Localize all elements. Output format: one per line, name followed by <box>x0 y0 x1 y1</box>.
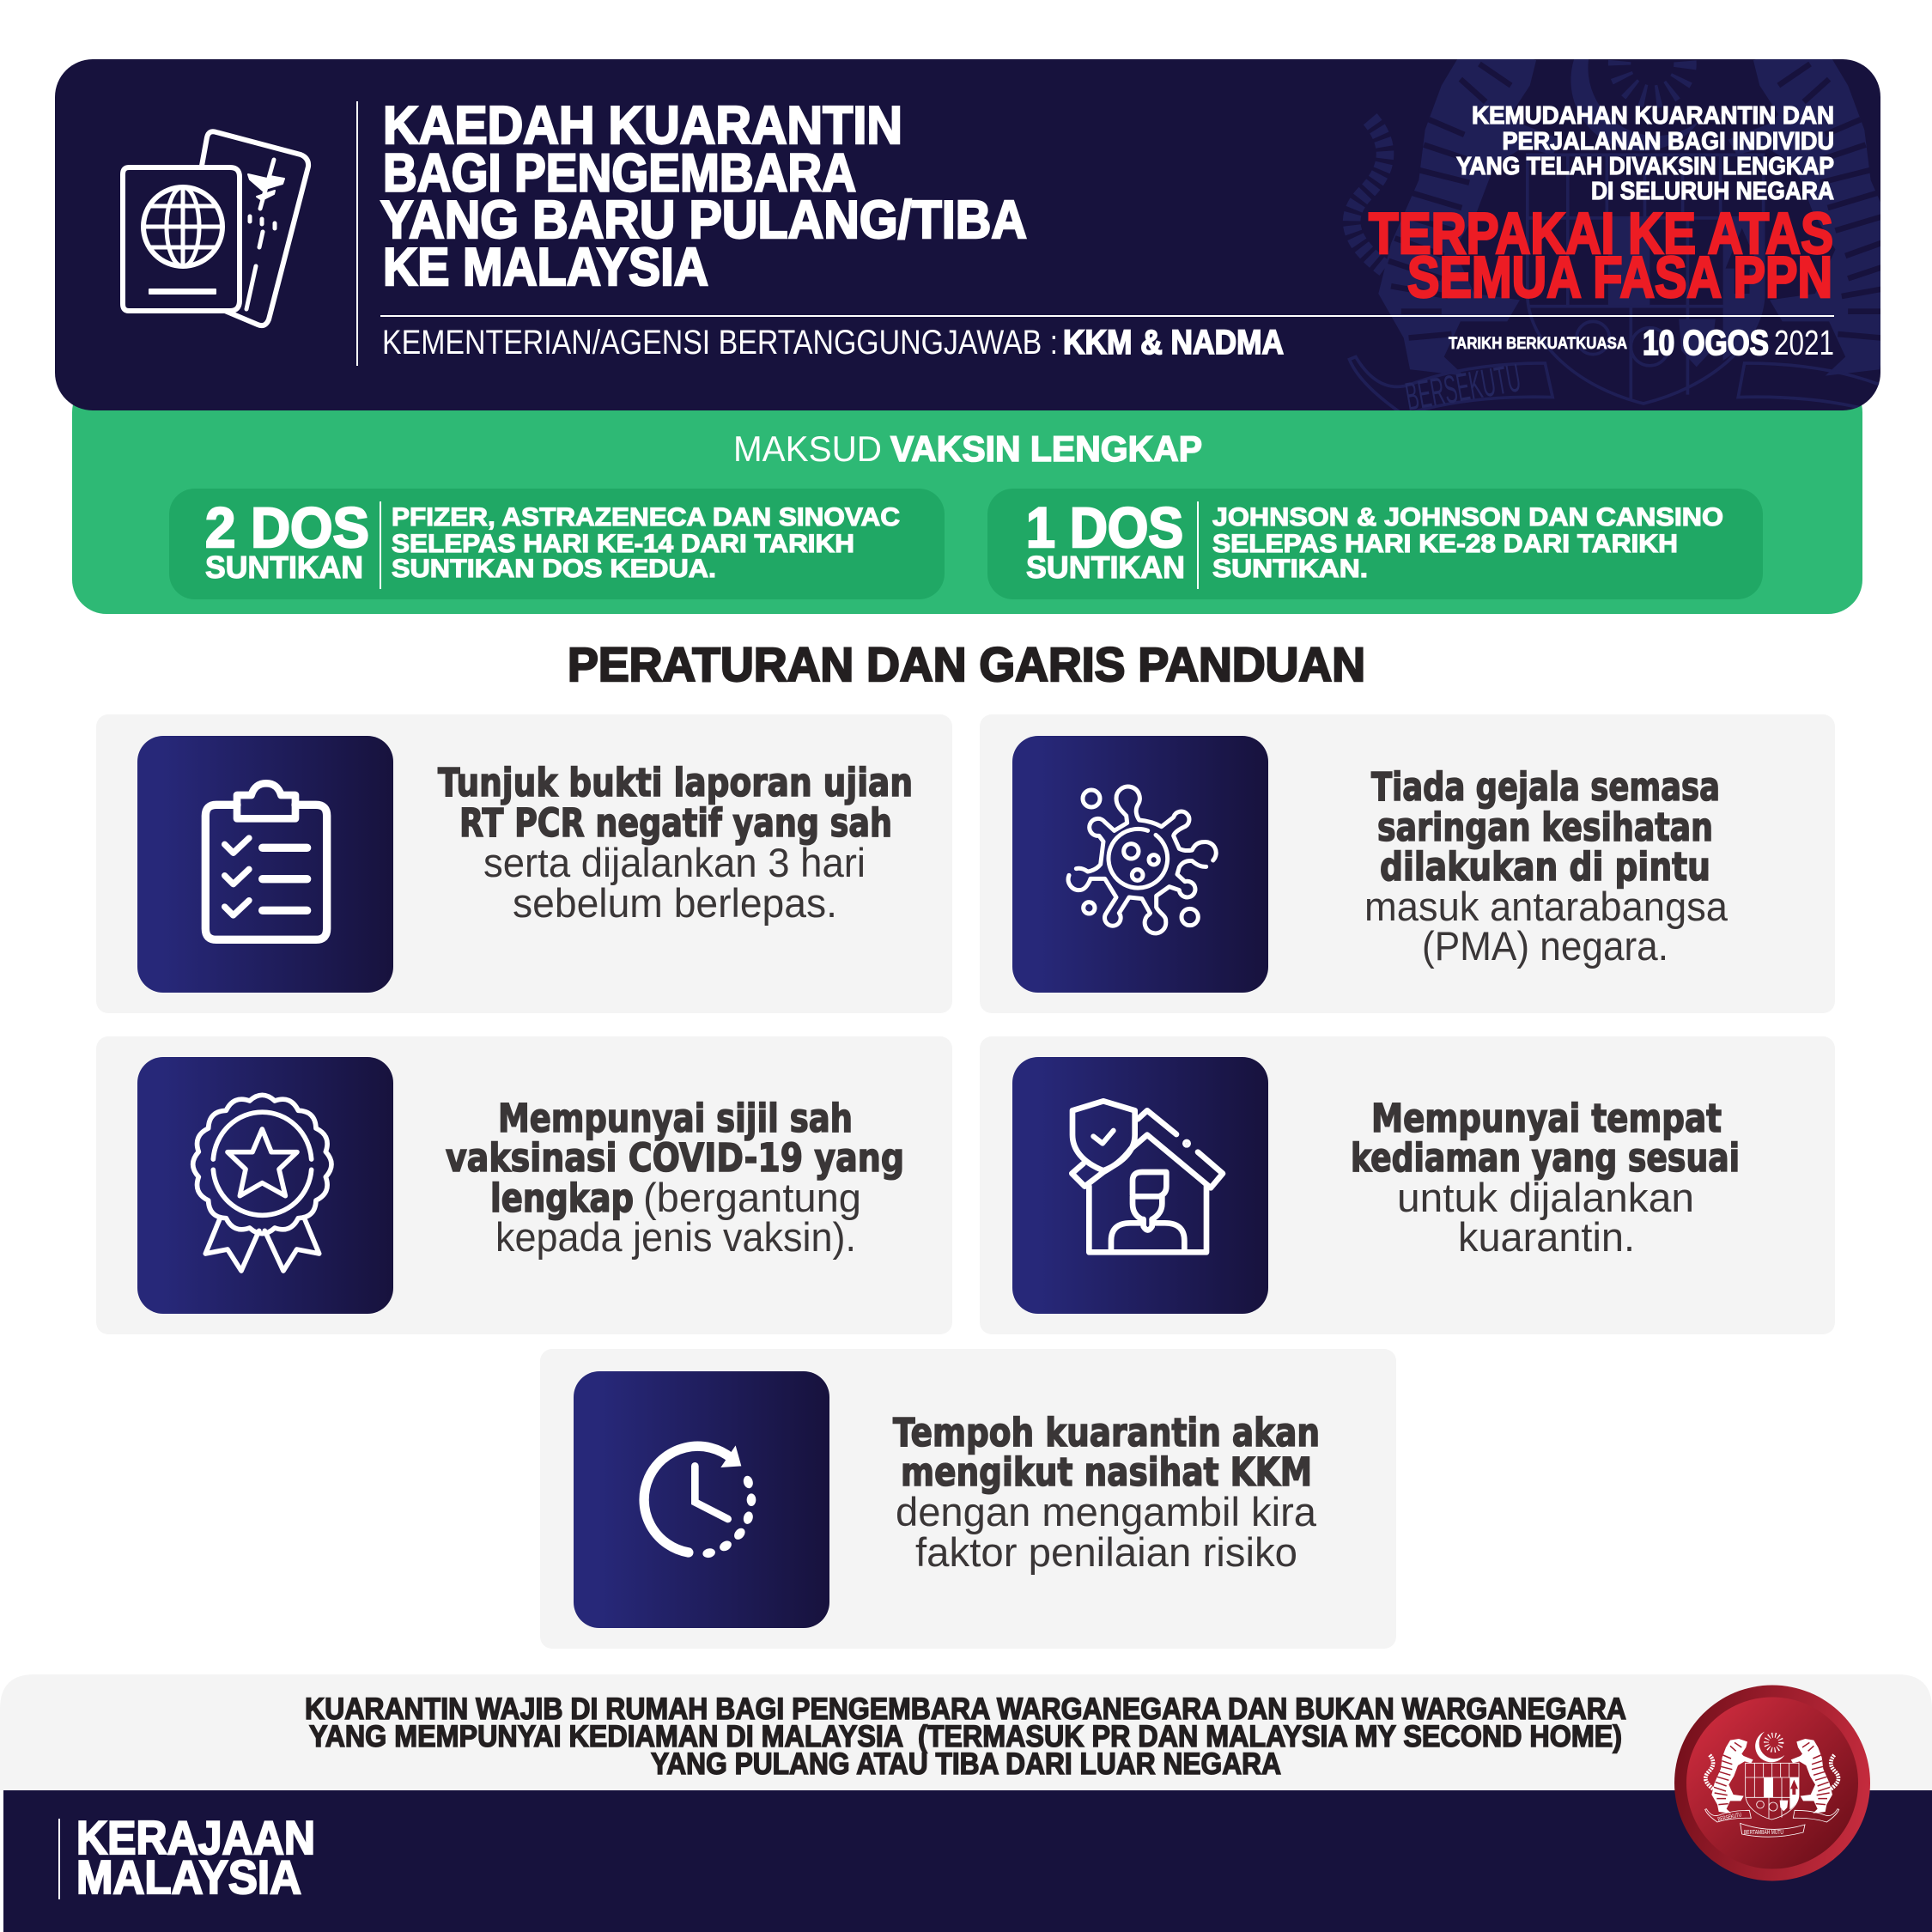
card: 1 dose: JOHNSON & JOHNSON DAN CANSINO <box>1212 503 1723 532</box>
panel: vaccine definition <box>72 378 1862 614</box>
text: certificate requirement: vaksinasi COVID-19 yang <box>446 1135 904 1181</box>
panel: vaccination certificate <box>96 1036 952 1334</box>
text: quarantine period <box>893 1410 1320 1575</box>
icon: government seal <box>1674 1685 1870 1880</box>
text: PCR requirement: RT PCR negatif yang sah <box>459 800 892 846</box>
text: mandatory home quarantine: YANG PULANG ATAU TIBA DARI LUAR NEGARA <box>651 1747 1281 1781</box>
title: KE MALAYSIA <box>383 238 708 297</box>
panel: footer bar <box>3 1790 1932 1932</box>
title: KAEDAH KUARANTIN <box>383 96 902 155</box>
text: certificate requirement: lengkap <box>490 1176 634 1221</box>
panel: PCR test <box>96 714 952 1013</box>
text: kerajaan malaysia: MALAYSIA <box>76 1850 301 1904</box>
red callout: SEMUA FASA PPN <box>1407 245 1832 310</box>
text: residence requirement: untuk dijalankan <box>1397 1175 1694 1220</box>
card: 2 doses <box>169 489 945 599</box>
card: 2 doses: PFIZER, ASTRAZENECA DAN SINOVAC <box>392 503 900 532</box>
card: 1 dose: SUNTIKAN <box>1026 550 1185 585</box>
text: residence requirement: kuarantin. <box>1458 1214 1635 1260</box>
effective date <box>1449 323 1834 362</box>
facility notice <box>1456 102 1834 205</box>
icon: clipboard checklist <box>205 783 327 939</box>
facility notice: KEMUDAHAN KUARANTIN DAN <box>1472 102 1834 130</box>
heading: maksud vaksin lengkap: VAKSIN LENGKAP <box>890 428 1202 469</box>
red callout: TERPAKAI KE ATAS <box>1369 201 1833 266</box>
responsible agency: KEMENTERIAN/AGENSI BERTANGGUNGJAWAB : <box>382 324 1058 361</box>
panel: quarantine period <box>540 1349 1396 1649</box>
facility notice: PERJALANAN BAGI INDIVIDU <box>1503 128 1834 155</box>
card: 1 dose: SUNTIKAN. <box>1212 555 1368 583</box>
text: certificate requirement: Mempunyai sijil sah <box>498 1096 853 1141</box>
text: symptom requirement: Tiada gejala semasa <box>1371 764 1720 810</box>
heading: maksud vaksin lengkap: MAKSUD <box>733 428 882 469</box>
text: residence requirement: Mempunyai tempat <box>1371 1096 1722 1141</box>
red callout <box>1369 201 1833 310</box>
panel: footer notice band <box>0 1674 1932 1790</box>
text: PCR requirement <box>438 760 913 926</box>
text: certificate requirement: (bergantung <box>643 1175 861 1220</box>
panel: header banner <box>55 59 1880 410</box>
text: certificate requirement <box>446 1096 904 1260</box>
icon: clock with arrow <box>644 1445 756 1558</box>
icon: virus <box>1068 787 1216 933</box>
facility notice: YANG TELAH DIVAKSIN LENGKAP <box>1456 153 1834 180</box>
effective date: TARIKH BERKUATKUASA <box>1449 335 1627 353</box>
divider: header vertical <box>356 101 358 366</box>
text: PCR requirement: serta dijalankan 3 hari <box>483 840 866 885</box>
facility notice: DI SELURUH NEGARA <box>1591 178 1834 205</box>
text: residence requirement: kediaman yang sesuai <box>1351 1135 1740 1181</box>
text: symptom requirement: (PMA) negara. <box>1422 923 1668 969</box>
icon: passport and boarding pass <box>123 131 308 325</box>
icon: award rosette <box>193 1095 331 1271</box>
text: mandatory home quarantine <box>305 1692 1626 1781</box>
text: certificate requirement: kepada jenis vaksin). <box>495 1214 856 1260</box>
text: kerajaan malaysia <box>76 1811 315 1904</box>
text: quarantine period: Tempoh kuarantin akan <box>893 1410 1320 1455</box>
text: PCR requirement: sebelum berlepas. <box>513 880 837 926</box>
panel: suitable residence <box>980 1036 1835 1334</box>
text: symptom requirement: saringan kesihatan <box>1377 805 1713 850</box>
watermark: coat of arms <box>1343 59 1880 410</box>
text: PCR requirement: Tunjuk bukti laporan ujian <box>438 760 913 805</box>
title: YANG BARU PULANG/TIBA <box>380 191 1027 250</box>
text: quarantine period: faktor penilaian risiko <box>915 1529 1297 1575</box>
effective date: 2021 <box>1774 323 1834 362</box>
text: kerajaan malaysia: KERAJAAN <box>76 1811 315 1864</box>
effective date: 10 OGOS <box>1643 323 1769 362</box>
text: residence requirement <box>1351 1096 1740 1260</box>
divider: header horizontal <box>380 315 1834 317</box>
text: symptom requirement: masuk antarabangsa <box>1364 884 1728 929</box>
heading: rules and guidelines: PERATURAN DAN GARIS PANDUAN <box>568 637 1365 691</box>
text: mandatory home quarantine: YANG MEMPUNYAI KEDIAMAN DI MALAYSIA (TERMASUK PR DAN MALAYSIA MY SECOND HOME) <box>309 1720 1622 1753</box>
icon: home with shield and person <box>1072 1101 1223 1252</box>
title <box>380 96 1027 297</box>
card: 1 dose: SELEPAS HARI KE-28 DARI TARIKH <box>1212 530 1678 558</box>
heading: maksud vaksin lengkap <box>733 428 1202 469</box>
text: mandatory home quarantine: KUARANTIN WAJIB DI RUMAH BAGI PENGEMBARA WARGANEGARA DAN BUKAN WARGANEGARA <box>305 1692 1626 1726</box>
title: BAGI PENGEMBARA <box>383 144 856 203</box>
icon: government seal: BERSEKUTU <box>1717 1812 1742 1823</box>
card: 2 doses: SUNTIKAN <box>205 550 363 585</box>
card: 2 doses: SUNTIKAN DOS KEDUA. <box>392 555 716 583</box>
text: quarantine period: dengan mengambil kira <box>896 1489 1317 1534</box>
icon: government seal: BERTAMBAH MUTU <box>1744 1830 1783 1836</box>
text: symptom requirement <box>1364 764 1728 969</box>
text: quarantine period: mengikut nasihat KKM <box>901 1449 1312 1495</box>
card: 1 dose <box>987 489 1763 599</box>
card: 2 doses: 2 DOS <box>205 495 369 559</box>
card: 1 dose: 1 DOS <box>1026 495 1183 559</box>
text: symptom requirement: dilakukan di pintu <box>1380 844 1710 890</box>
card: 2 doses: SELEPAS HARI KE-14 DARI TARIKH <box>392 530 854 558</box>
watermark: coat of arms: BERSEKUTU <box>1402 355 1524 419</box>
panel: no symptoms <box>980 714 1835 1013</box>
responsible agency: KKM & NADMA <box>1063 324 1284 361</box>
